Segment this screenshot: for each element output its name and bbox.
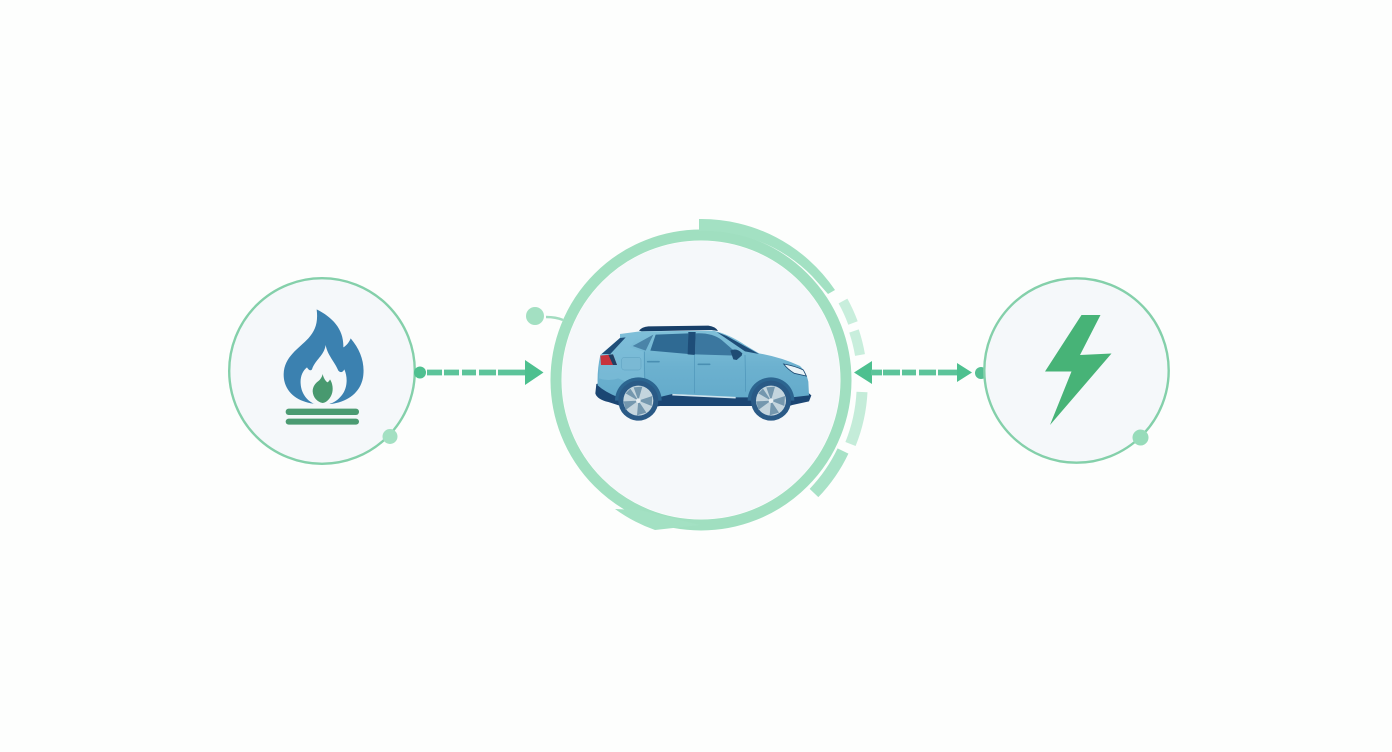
door lines: [644, 352, 746, 393]
icon: lightning bolt: [1045, 315, 1112, 425]
node: electricity circle dot: [1132, 430, 1148, 446]
windows: [633, 335, 653, 351]
rear pillar highlight: [599, 332, 644, 390]
wheel arches: [615, 377, 662, 401]
panel: electricity circle: [984, 278, 1169, 463]
roof rail: [639, 326, 718, 331]
body: [598, 331, 809, 397]
taillight: [600, 354, 617, 365]
node: top left satellite: [526, 307, 563, 325]
fuel door: [622, 357, 641, 370]
rear wheel: [618, 381, 658, 421]
headlight: [784, 364, 806, 376]
ring arc: bottom left: [615, 509, 700, 530]
door handles: [648, 362, 710, 364]
ring arc: upper right: [699, 219, 835, 294]
sill highlight: [672, 395, 736, 398]
ring segment: right lower two: [814, 451, 843, 493]
icon: blue SUV: [595, 326, 811, 421]
panel: fuel circle: [229, 278, 415, 464]
arrow: fuel to car: [414, 360, 544, 385]
ring segment: right upper one: [843, 301, 853, 323]
ring segment: right upper two: [854, 331, 860, 355]
mirror: [730, 349, 742, 360]
node: fuel circle dot: [382, 429, 398, 444]
panel: central vehicle ring: [526, 219, 862, 530]
arrow: bidirectional car and electricity: [854, 361, 987, 384]
front wheel: [751, 381, 791, 421]
ring segment: right lower one: [850, 392, 862, 444]
lower rear bumper: [595, 382, 811, 407]
icon: flame with burner bars: [284, 309, 364, 425]
